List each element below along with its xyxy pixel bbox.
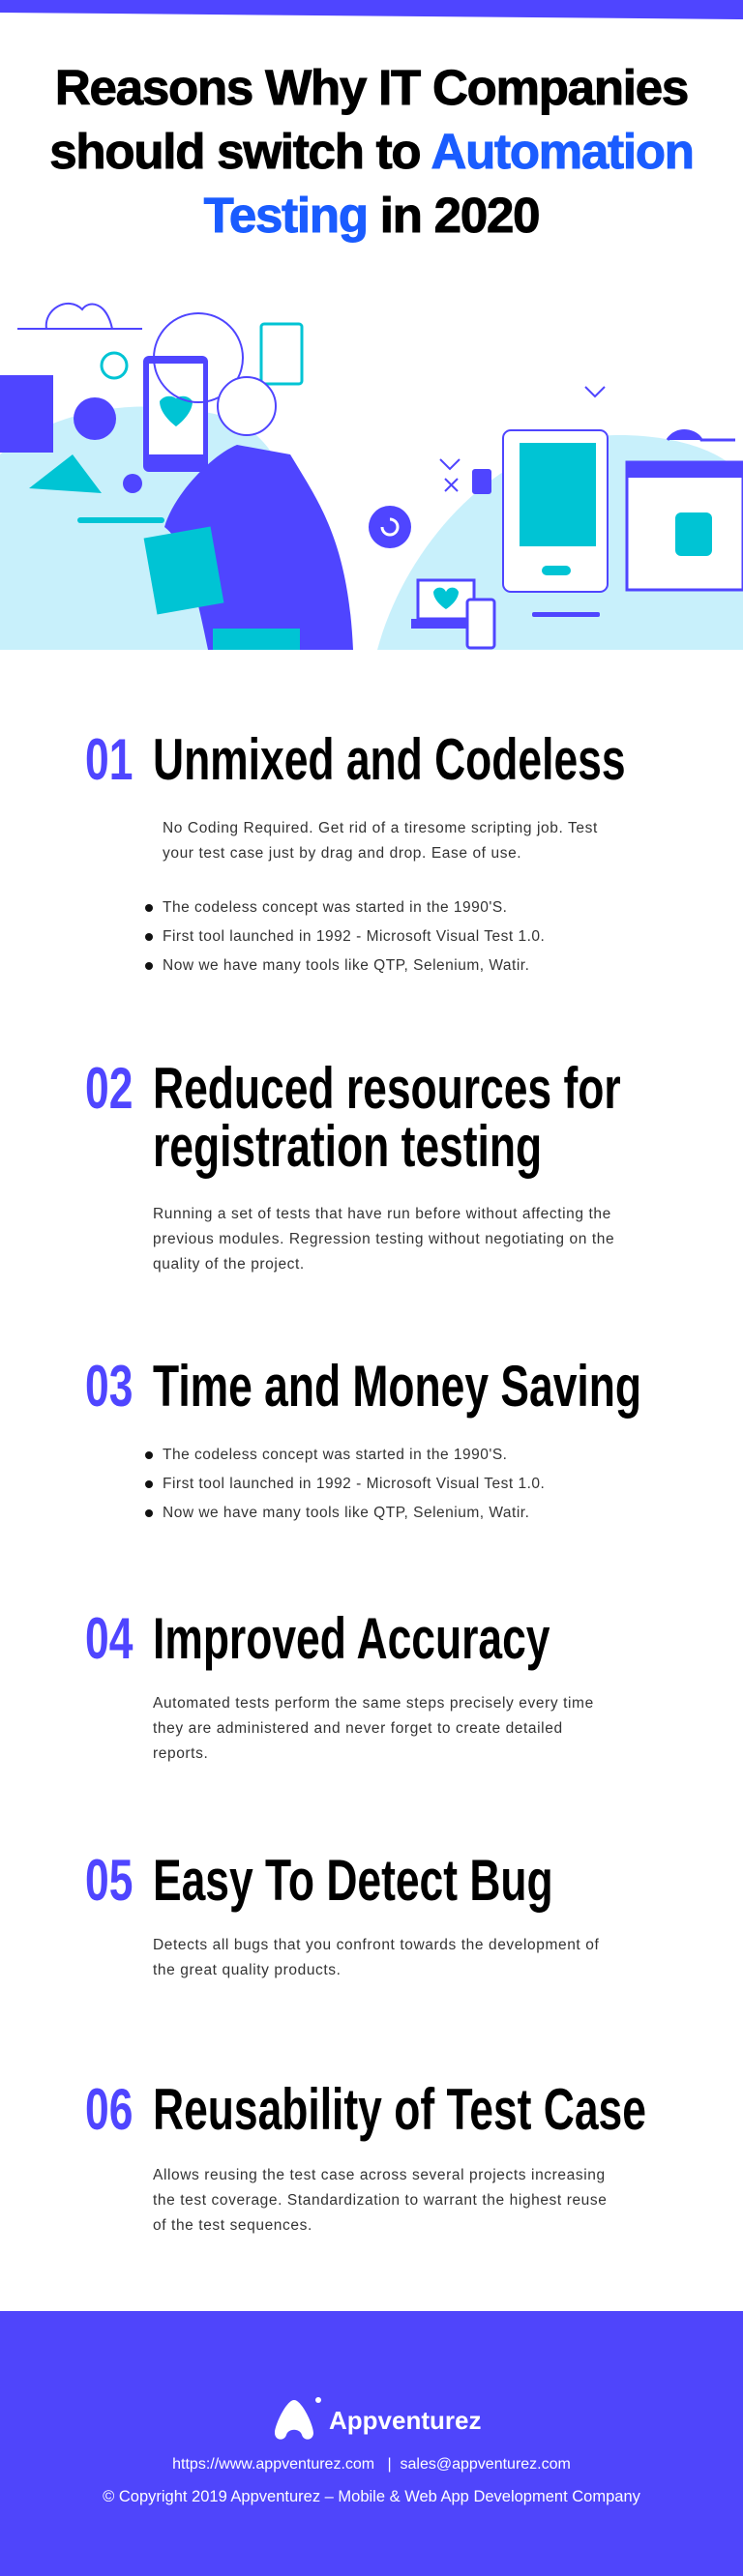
footer <box>0 2311 743 2576</box>
section 01 text: No Coding Required. Get rid of a tiresome scripting job. Test your test case just by drag and drop. Ease of use. <box>163 820 598 862</box>
section 01 bullets <box>145 899 545 974</box>
title: Testing in 2020 <box>204 188 539 243</box>
section 05 text: Detects all bugs that you confront towards the development of the great quality products. <box>153 1937 599 1978</box>
footer contact links: https://www.appventurez.com | sales@appventurez.com <box>172 2456 571 2473</box>
section 01 bullets: The codeless concept was started in the 1990'S. <box>163 899 507 916</box>
section 01 bullets: First tool launched in 1992 - Microsoft Visual Test 1.0. <box>163 928 545 945</box>
section 02 number: 02 <box>85 1056 133 1121</box>
section 01 bullets: Now we have many tools like QTP, Selenium, Watir. <box>163 957 529 974</box>
section 04 text: Automated tests perform the same steps precisely every time they are administered and never forget to create detailed reports. <box>153 1695 594 1762</box>
footer logo: Appventurez <box>329 2406 481 2435</box>
section 04 number: 04 <box>85 1606 133 1671</box>
section 03 bullets <box>145 1447 545 1521</box>
section 05 heading: Easy To Detect Bug <box>153 1848 553 1913</box>
section 02 heading: Reduced resources for <box>153 1056 621 1121</box>
section 03 bullets: The codeless concept was started in the 1990'S. <box>163 1447 507 1463</box>
section 03 bullets: Now we have many tools like QTP, Selenium, Watir. <box>163 1505 529 1521</box>
section 01 heading: Unmixed and Codeless <box>153 727 626 792</box>
section 03 bullets: First tool launched in 1992 - Microsoft Visual Test 1.0. <box>163 1476 545 1492</box>
footer logo <box>275 2397 481 2440</box>
section 06 heading: Reusability of Test Case <box>153 2077 646 2142</box>
illustration: automation testing scene <box>0 302 743 650</box>
top accent bar <box>0 0 743 19</box>
section 02 heading <box>153 1056 621 1179</box>
section 03 number: 03 <box>85 1354 133 1419</box>
section 06 text: Allows reusing the test case across several projects increasing the test coverage. Standardization to warrant the highest reuse of the test sequences. <box>153 2167 607 2234</box>
footer copyright: © Copyright 2019 Appventurez – Mobile & Web App Development Company <box>103 2488 640 2505</box>
section 03 heading: Time and Money Saving <box>153 1354 641 1419</box>
section 05 number: 05 <box>85 1848 133 1913</box>
section 04 heading: Improved Accuracy <box>153 1606 550 1671</box>
title: Reasons Why IT Companies <box>55 60 688 115</box>
title: should switch to Automation <box>49 124 694 179</box>
section 02 heading: registration testing <box>153 1114 542 1179</box>
section 02 text: Running a set of tests that have run before without affecting the previous modules. Regression testing without negotiating on the quality of the project. <box>153 1206 614 1273</box>
section 01 number: 01 <box>85 727 133 792</box>
section 06 number: 06 <box>85 2077 133 2142</box>
title <box>49 60 694 243</box>
